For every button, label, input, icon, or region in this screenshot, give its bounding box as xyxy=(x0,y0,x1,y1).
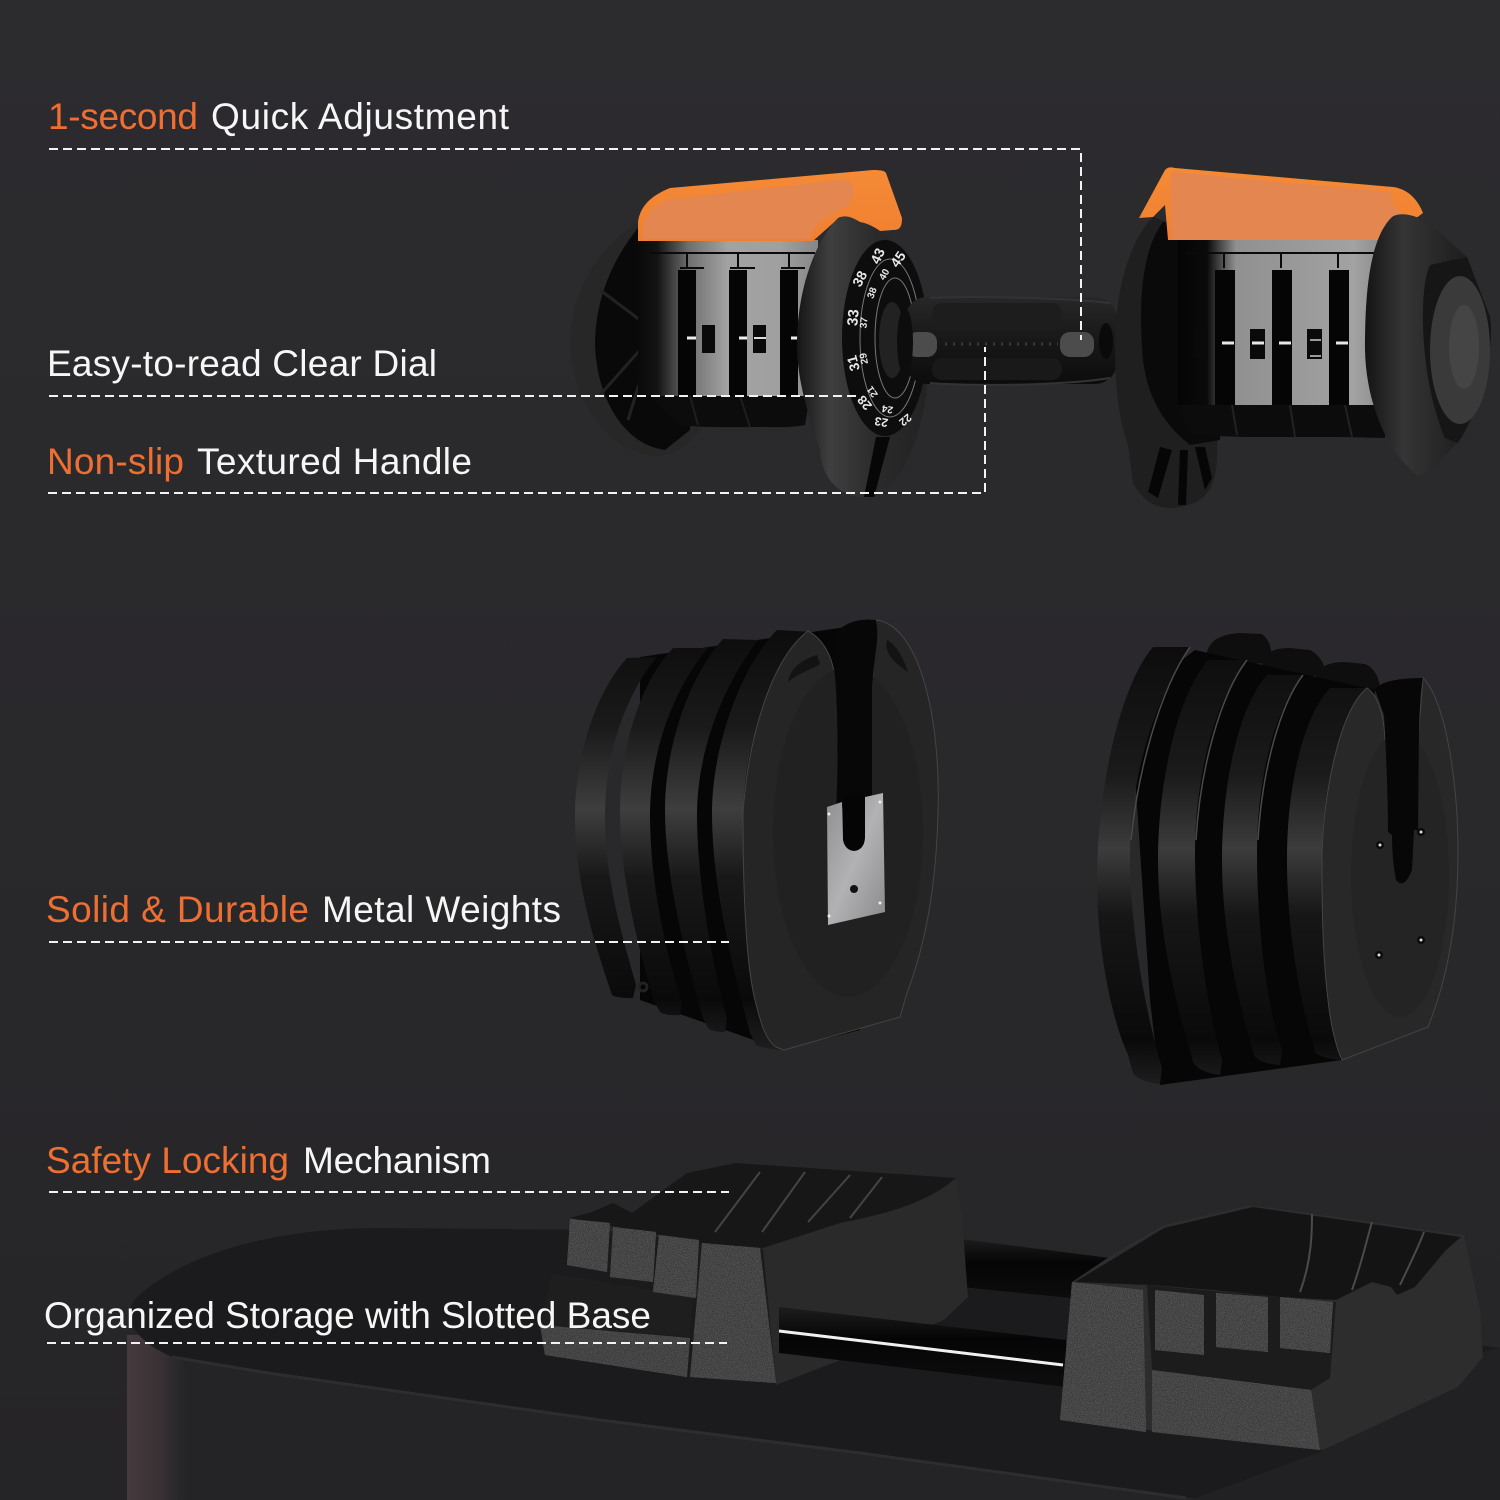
dial face xyxy=(842,240,928,436)
label: Solid & Durable Metal Weights: Metal Weights xyxy=(322,889,561,930)
handle xyxy=(897,297,1117,385)
handle buttons xyxy=(907,332,937,357)
label: Safety Locking Mechanism xyxy=(46,1140,729,1192)
plate slot xyxy=(832,620,877,810)
dial face: 38 xyxy=(866,286,880,300)
dial numbers: 38 xyxy=(849,268,870,289)
label: Easy-to-read Clear Dial: Easy-to-read Clear Dial xyxy=(47,343,437,384)
dial face: 31 xyxy=(843,353,863,373)
inner flange xyxy=(1115,217,1220,508)
orange handle cover xyxy=(638,170,902,241)
metal body xyxy=(1178,240,1388,405)
side face xyxy=(763,1178,968,1385)
plate 1 rim xyxy=(712,630,812,1050)
cavity xyxy=(570,1163,956,1248)
plate gap shadow xyxy=(640,625,860,1050)
dial face: 29 xyxy=(858,352,871,365)
label: Solid & Durable Metal Weights: Solid & Durable xyxy=(46,889,309,930)
label: Organized Storage with Slotted Base: Organized Storage with Slotted Base xyxy=(44,1295,651,1336)
label: Solid & Durable Metal Weights xyxy=(46,889,729,942)
weight slots xyxy=(678,270,696,396)
label: 1-second Quick Adjustment xyxy=(48,96,1081,340)
lower black section xyxy=(650,396,810,427)
label: 1-second Quick Adjustment: 1-second xyxy=(48,96,198,137)
right dumbbell head xyxy=(1115,167,1491,508)
front plate face xyxy=(1322,678,1458,1060)
dial face: 45 xyxy=(887,248,909,270)
dial disc and paddle xyxy=(797,216,928,498)
orange handle cover xyxy=(1139,167,1423,240)
base silhouette xyxy=(1060,1205,1483,1450)
dial face: 37 xyxy=(859,316,871,329)
silver bracket xyxy=(827,793,885,925)
weight slots xyxy=(1215,270,1235,412)
dark lower band xyxy=(540,1273,693,1337)
lower black section xyxy=(1180,405,1385,438)
label: Non-slip Textured Handle xyxy=(47,347,985,493)
label: Non-slip Textured Handle: Non-slip xyxy=(47,441,184,482)
left weight plates xyxy=(575,620,938,1050)
plate 3 rim xyxy=(620,648,708,1015)
metal body xyxy=(638,240,818,396)
table: dark pedestal under storage base xyxy=(127,1228,1500,1500)
plate grip cutouts xyxy=(788,655,820,682)
back top lobes xyxy=(1205,633,1272,670)
plate 4 back rim xyxy=(575,657,657,998)
end cap xyxy=(1365,214,1491,475)
storage bar back xyxy=(953,1238,1110,1302)
plate 2 rim xyxy=(1158,660,1247,1075)
plate 3 rim xyxy=(1222,675,1303,1065)
dial face: 40 xyxy=(877,267,893,282)
plate 4 rim xyxy=(1287,688,1367,1060)
label: Non-slip Textured Handle: Textured Handle xyxy=(197,441,472,482)
dark band xyxy=(1147,1285,1336,1390)
left dumbbell head xyxy=(570,170,928,498)
dial face: 43 xyxy=(867,245,888,266)
right storage base xyxy=(1060,1205,1483,1450)
label: Safety Locking Mechanism: Mechanism xyxy=(303,1140,491,1181)
outer left cap xyxy=(570,223,705,456)
label: Safety Locking Mechanism: Safety Locking xyxy=(46,1140,289,1181)
plate 2 rim xyxy=(665,639,758,1032)
plate gap shadow xyxy=(1130,650,1375,1085)
dial face: 21 xyxy=(865,383,881,399)
dial face: 22 xyxy=(896,411,913,428)
plate slot xyxy=(1375,678,1423,883)
dial face: 23 xyxy=(873,414,889,430)
dial face: 24 xyxy=(881,402,894,415)
cavity xyxy=(1075,1207,1461,1300)
dial face: 33 xyxy=(844,309,863,327)
dial face: 28 xyxy=(854,393,875,413)
screws xyxy=(1376,841,1384,849)
right weight plates xyxy=(1097,633,1458,1085)
label: 1-second Quick Adjustment: Quick Adjustment xyxy=(211,96,510,137)
plate 1 rim xyxy=(1097,647,1190,1084)
front plate face xyxy=(743,620,938,1050)
storage bar front xyxy=(779,1307,1066,1387)
left storage base xyxy=(540,1163,968,1385)
